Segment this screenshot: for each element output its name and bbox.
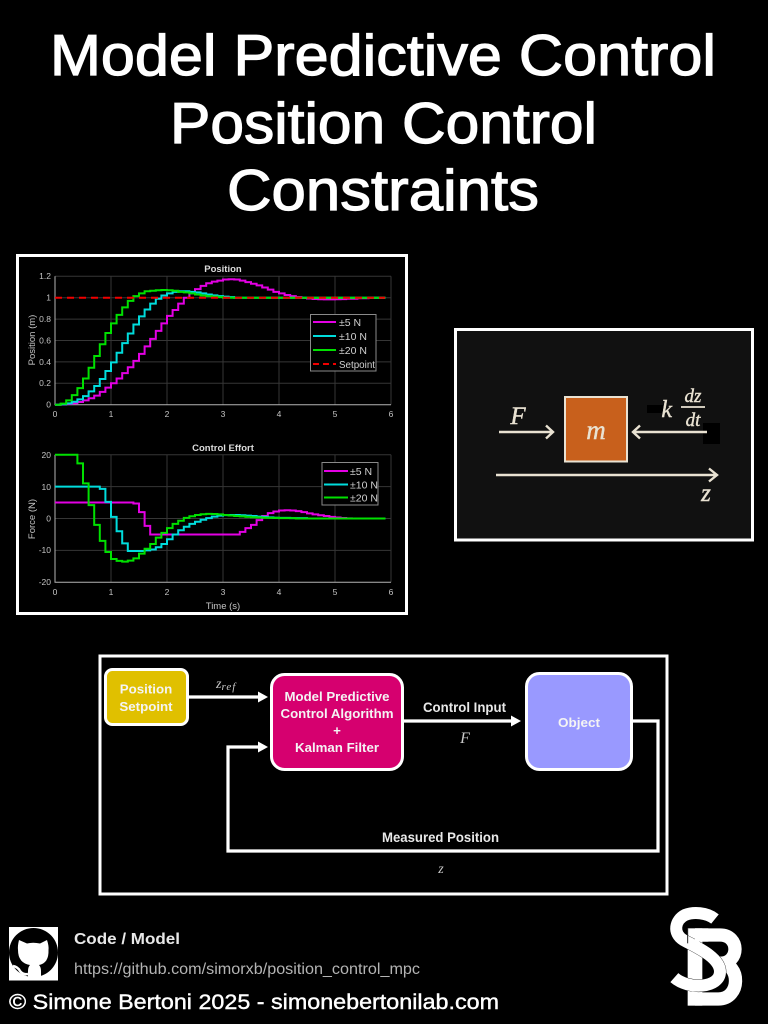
arrow: damping force: k (661, 397, 672, 423)
icon: SB logo (674, 913, 736, 1006)
arrow: force F: F (509, 403, 526, 430)
arrow: force F (499, 403, 553, 438)
text: copyright: © Simone Bertoni 2025 - simonebertonilab.com (9, 991, 499, 1014)
chart: position: 5 (333, 409, 338, 419)
title: Position Control (170, 92, 597, 156)
arrow: z axis: z (700, 480, 711, 507)
chart: position: 0 (53, 409, 58, 419)
chart: position: 0.6 (39, 336, 51, 346)
chart: control effort: 6 (389, 587, 394, 597)
icon: mass block (565, 397, 627, 462)
arrow: damping force: dt (686, 410, 701, 431)
text: repository url: https://github.com/simorxb/position_control_mpc (74, 961, 420, 978)
chart: position: 3 (221, 409, 226, 419)
chart: control effort: 2 (165, 587, 170, 597)
legend: position: ±10 N (339, 331, 367, 343)
chart: position (27, 264, 394, 419)
chart: control effort (27, 443, 394, 612)
arrow: z ref: ref (221, 681, 237, 693)
legend: control effort: ±5 N (350, 466, 372, 478)
chart: position: 2 (165, 409, 170, 419)
block: model predictive controller: + (333, 723, 341, 738)
chart: control effort: 10 (42, 482, 51, 492)
text: code link heading: Code / Model (74, 931, 180, 948)
title: Constraints (227, 159, 539, 223)
chart: control effort: Force (N) (27, 499, 38, 539)
chart: position: 4 (277, 409, 282, 419)
chart: control effort: 20 (42, 450, 51, 460)
arrow: z axis (496, 468, 717, 507)
legend: control effort: ±20 N (350, 492, 378, 504)
block: model predictive controller: Model Predictive (284, 689, 390, 704)
block: object (526, 674, 632, 770)
chart: position: 6 (389, 409, 394, 419)
panel: block diagram (100, 656, 667, 894)
chart: position: 0.2 (39, 378, 51, 388)
arrow: measured position feedback: Measured Position (382, 829, 499, 845)
panel: simulation charts (18, 256, 406, 614)
arrow: damping force: dz (685, 386, 702, 407)
legend: control effort: ±10 N (350, 480, 378, 492)
legend: position: Setpoint (339, 359, 375, 371)
chart: position: 1 (109, 409, 114, 419)
chart: position: 0 (46, 400, 51, 410)
block: position setpoint: Setpoint (119, 699, 173, 714)
panel: mass-damper sketch (456, 330, 752, 540)
legend: position: ±5 N (339, 317, 361, 329)
chart: control effort: -20 (39, 577, 51, 587)
icon: github logo (9, 927, 58, 980)
title (50, 24, 716, 223)
block: model predictive controller (272, 674, 402, 770)
chart: control effort: 4 (277, 587, 282, 597)
chart: position: Position (204, 264, 242, 275)
chart: control effort: -10 (39, 545, 51, 555)
block: position setpoint (106, 670, 188, 724)
block: position setpoint: Position (120, 682, 172, 696)
chart: control effort: Time (s) (206, 601, 240, 612)
title: Model Predictive Control (50, 24, 716, 88)
icon: mass block: m (586, 415, 606, 445)
arrow: control input: Control Input (423, 699, 506, 715)
chart: position: 0.8 (39, 314, 51, 324)
chart: control effort: 5 (333, 587, 338, 597)
chart: control effort: 3 (221, 587, 226, 597)
arrow: z ref (189, 677, 268, 702)
chart: control effort: 0 (53, 587, 58, 597)
arrow: damping force (633, 386, 720, 444)
arrow: control input: F (459, 730, 470, 747)
block: model predictive controller: Kalman Filter (295, 740, 379, 755)
legend: control effort (322, 462, 378, 505)
chart: control effort: 0 (46, 514, 51, 524)
block: object: Object (558, 715, 601, 730)
arrow: measured position feedback: z (437, 862, 444, 877)
arrow: measured position feedback (228, 721, 658, 877)
arrow: control input (403, 699, 521, 747)
chart: position: 1.2 (39, 271, 51, 281)
chart: position: Position (m) (27, 315, 38, 365)
chart: control effort: 1 (109, 587, 114, 597)
arrow: z ref: z (216, 677, 221, 692)
legend: position: ±20 N (339, 345, 367, 357)
chart: position: 0.4 (39, 357, 51, 367)
block: model predictive controller: Control Algorithm (280, 706, 394, 721)
legend: position (310, 314, 376, 371)
chart: control effort: Control Effort (192, 443, 255, 454)
chart: position: 1 (46, 292, 51, 302)
